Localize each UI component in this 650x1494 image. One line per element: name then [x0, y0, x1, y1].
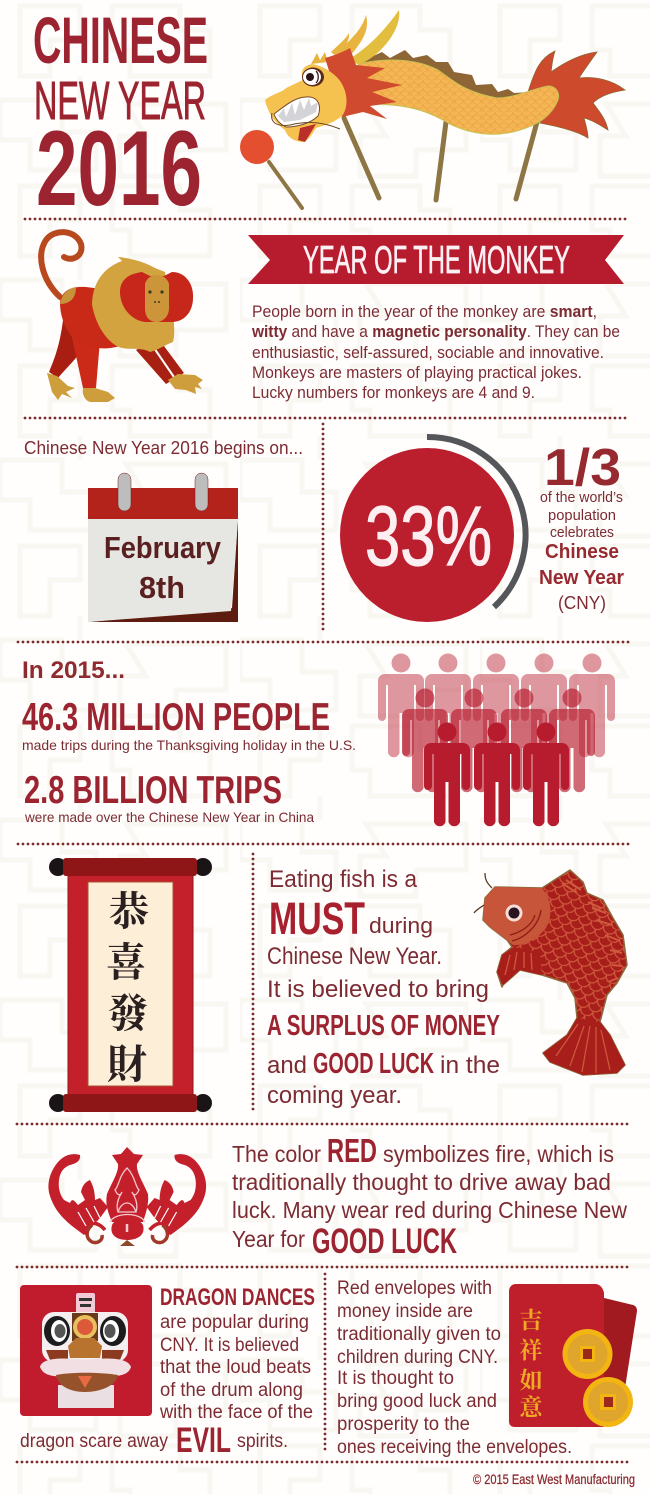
red envelope text: It is thought to [337, 1368, 454, 1389]
divider [18, 641, 633, 643]
fish text: in the [440, 1052, 500, 1079]
travel statistics [22, 657, 356, 825]
fish text: during [369, 913, 433, 938]
fish text: Chinese New Year. [267, 943, 442, 970]
scroll top rod [49, 858, 212, 876]
dragon body [358, 60, 559, 134]
monkey description text: Lucky numbers for monkeys are 4 and 9. [252, 384, 535, 402]
divider [322, 424, 324, 634]
mask forehead [72, 1313, 98, 1341]
calendar date: 8th [139, 570, 185, 605]
icon: koi fish [474, 870, 627, 1075]
red envelope text: traditionally given to [337, 1324, 501, 1345]
front envelope [509, 1284, 604, 1427]
divider [324, 1274, 326, 1453]
dragon dances text: DRAGON DANCES [160, 1284, 315, 1311]
fish text: coming year. [267, 1082, 402, 1109]
icon: red bat ornament [48, 1147, 206, 1246]
color red text: traditionally thought to drive away bad [232, 1169, 611, 1195]
fish gill lines [510, 910, 541, 941]
mask head [42, 1312, 128, 1362]
monkey description text: enthusiastic, self-assured, sociable and innovative. [252, 344, 604, 362]
one third statistic: New Year [539, 567, 624, 589]
fish body [483, 870, 627, 1075]
fish tail [543, 1018, 625, 1075]
calendar page shadow [89, 519, 238, 622]
back row [378, 654, 615, 757]
envelope characters [520, 1308, 544, 1420]
mask lip [40, 1358, 131, 1377]
coin one [562, 1329, 612, 1379]
monkey hip patch [60, 287, 76, 304]
fish dorsal stripes [562, 880, 622, 982]
envelope characters: 意 [520, 1394, 544, 1420]
coin two [583, 1377, 633, 1427]
dragon dances text: that the loud beats [160, 1357, 311, 1378]
divider [252, 854, 254, 1113]
color red text: luck. Many wear red during Chinese New [232, 1197, 627, 1223]
divider [17, 1123, 632, 1125]
color red text: The color [232, 1141, 321, 1167]
icon: red envelopes and coins [509, 1284, 637, 1427]
scroll characters: 喜 [106, 940, 146, 985]
scroll characters [106, 889, 149, 1087]
title: 2016 [36, 108, 202, 228]
mask chin [58, 1385, 114, 1408]
dragon teeth [278, 98, 318, 122]
dragon antlers [311, 10, 399, 64]
one third statistic: of the world’s [540, 490, 623, 506]
dragon dances text: are popular during [160, 1312, 309, 1333]
monkey description text: Monkeys are masters of playing practical jokes. [252, 364, 582, 382]
monkey eyes and nostrils [148, 290, 164, 303]
dragon ball [240, 130, 302, 208]
scroll paper [88, 882, 173, 1086]
envelope characters: 祥 [520, 1338, 542, 1363]
mask mouth [56, 1373, 118, 1392]
travel statistics: 46.3 MILLION PEOPLE [22, 696, 330, 739]
color red text: GOOD LUCK [312, 1222, 457, 1261]
one third statistic: (CNY) [558, 592, 606, 613]
calendar date [104, 530, 222, 605]
fish eye [506, 904, 522, 922]
red envelope text: bring good luck and [337, 1391, 497, 1412]
one third statistic: 1/3 [544, 439, 621, 497]
dragon sticks [344, 118, 537, 200]
one third statistic: population [548, 508, 616, 524]
travel statistics: 2.8 BILLION TRIPS [24, 769, 282, 812]
fish text: A SURPLUS OF MONEY [267, 1010, 500, 1042]
scroll characters: 發 [108, 991, 148, 1036]
dragon dances text: of the drum along [160, 1380, 303, 1401]
fish text: MUST [269, 893, 365, 944]
dragon dances text: with the face of the [159, 1402, 313, 1423]
monkey legs [49, 310, 184, 388]
one third statistic [539, 439, 624, 613]
mask tongue [78, 1376, 92, 1388]
fish fin rays [505, 952, 532, 975]
fish text: Eating fish is a [269, 866, 418, 893]
fish barbels [474, 873, 492, 913]
red envelope text [337, 1278, 572, 1458]
title: NEW YEAR [34, 71, 206, 131]
icon: monkey [41, 232, 203, 402]
envelope characters: 如 [520, 1368, 542, 1393]
divider [17, 1266, 632, 1268]
ornament flower [110, 1214, 145, 1246]
icon: dragon puppet with sticks and ball [240, 10, 625, 208]
monkey description text: People born in the year of the monkey are smart, [252, 303, 597, 321]
icon: crowd of people [378, 654, 615, 826]
scroll panel [68, 872, 193, 1098]
fish head [483, 887, 551, 945]
red envelope text: children during CNY. [337, 1347, 498, 1368]
dragon dances text: spirits. [237, 1431, 288, 1452]
divider [17, 1461, 632, 1463]
color red text: RED [327, 1132, 377, 1169]
travel statistics: were made over the Chinese New Year in China [24, 809, 314, 825]
monkey tail [41, 232, 81, 297]
back envelope [590, 1297, 637, 1420]
dragon dances text [20, 1284, 315, 1460]
dragon dances text: dragon scare away [20, 1431, 168, 1452]
red envelope text: ones receiving the envelopes. [337, 1437, 572, 1458]
color red text: symbolizes fire, which is [383, 1141, 614, 1167]
middle row [402, 688, 595, 792]
dragon whisker [272, 113, 340, 129]
divider [25, 218, 628, 220]
dragon lower jaw [298, 124, 316, 142]
fish text: It is believed to bring [267, 976, 489, 1003]
icon: scroll with Chinese characters [49, 858, 212, 1112]
calendar header [88, 488, 238, 519]
ornament center detail [115, 1168, 139, 1212]
red envelope text: prosperity to the [337, 1414, 470, 1435]
mask crest [76, 1293, 95, 1313]
mask eyes [44, 1316, 126, 1346]
front row [424, 722, 569, 826]
fish side fin [497, 947, 542, 985]
one third statistic: Chinese [545, 541, 619, 563]
ornament center flame [106, 1147, 148, 1222]
title [33, 3, 208, 228]
date heading: Chinese New Year 2016 begins on... [24, 437, 303, 458]
chart: 33% circle [340, 437, 526, 622]
calendar date: February [104, 530, 222, 565]
travel statistics: made trips during the Thanksgiving holiday in the U.S. [22, 737, 356, 753]
dragon head [265, 64, 346, 142]
mask nose [68, 1338, 102, 1358]
dragon back spikes [360, 50, 530, 100]
travel statistics: In 2015... [22, 657, 125, 684]
envelope characters: 吉 [520, 1308, 542, 1333]
dragon dances text: CNY. It is believed [160, 1335, 299, 1356]
scroll characters: 恭 [109, 889, 149, 934]
scroll characters: 財 [107, 1042, 147, 1087]
monkey cheek fluff [120, 272, 193, 322]
scroll bottom rod [49, 1094, 212, 1112]
fish text: GOOD LUCK [313, 1048, 434, 1080]
monkey body [60, 287, 120, 348]
dragon mane [325, 48, 402, 119]
monkey description text [251, 303, 620, 402]
fish tail rays [556, 1024, 610, 1073]
divider [25, 417, 628, 419]
mask cheeks [46, 1350, 124, 1360]
chart: 33% circle: 33% [365, 489, 492, 583]
fish text [267, 866, 500, 1109]
red envelope text: money inside are [337, 1301, 473, 1322]
ornament left half [48, 1154, 108, 1243]
panel: dragon dance mask [20, 1285, 152, 1416]
monkey face [145, 275, 169, 322]
calendar page [88, 519, 238, 622]
title: CHINESE [33, 3, 208, 77]
color red text: Year for [232, 1226, 305, 1252]
one third statistic: celebrates [550, 525, 614, 541]
red envelope text: Red envelopes with [337, 1278, 492, 1299]
dragon mouth [274, 97, 320, 127]
ornament right half [147, 1154, 206, 1243]
monkey description text: witty and have a magnetic personality. They can be [251, 323, 620, 341]
monkey mane [92, 257, 174, 352]
color red text [232, 1132, 627, 1261]
monkey paws [47, 373, 203, 402]
fish text: and [267, 1052, 307, 1079]
dragon eye [302, 68, 324, 86]
dragon tail [528, 51, 625, 138]
divider [18, 843, 633, 845]
calendar rings [118, 473, 208, 511]
dragon dances text: EVIL [176, 1421, 231, 1460]
icon: calendar [88, 473, 238, 622]
